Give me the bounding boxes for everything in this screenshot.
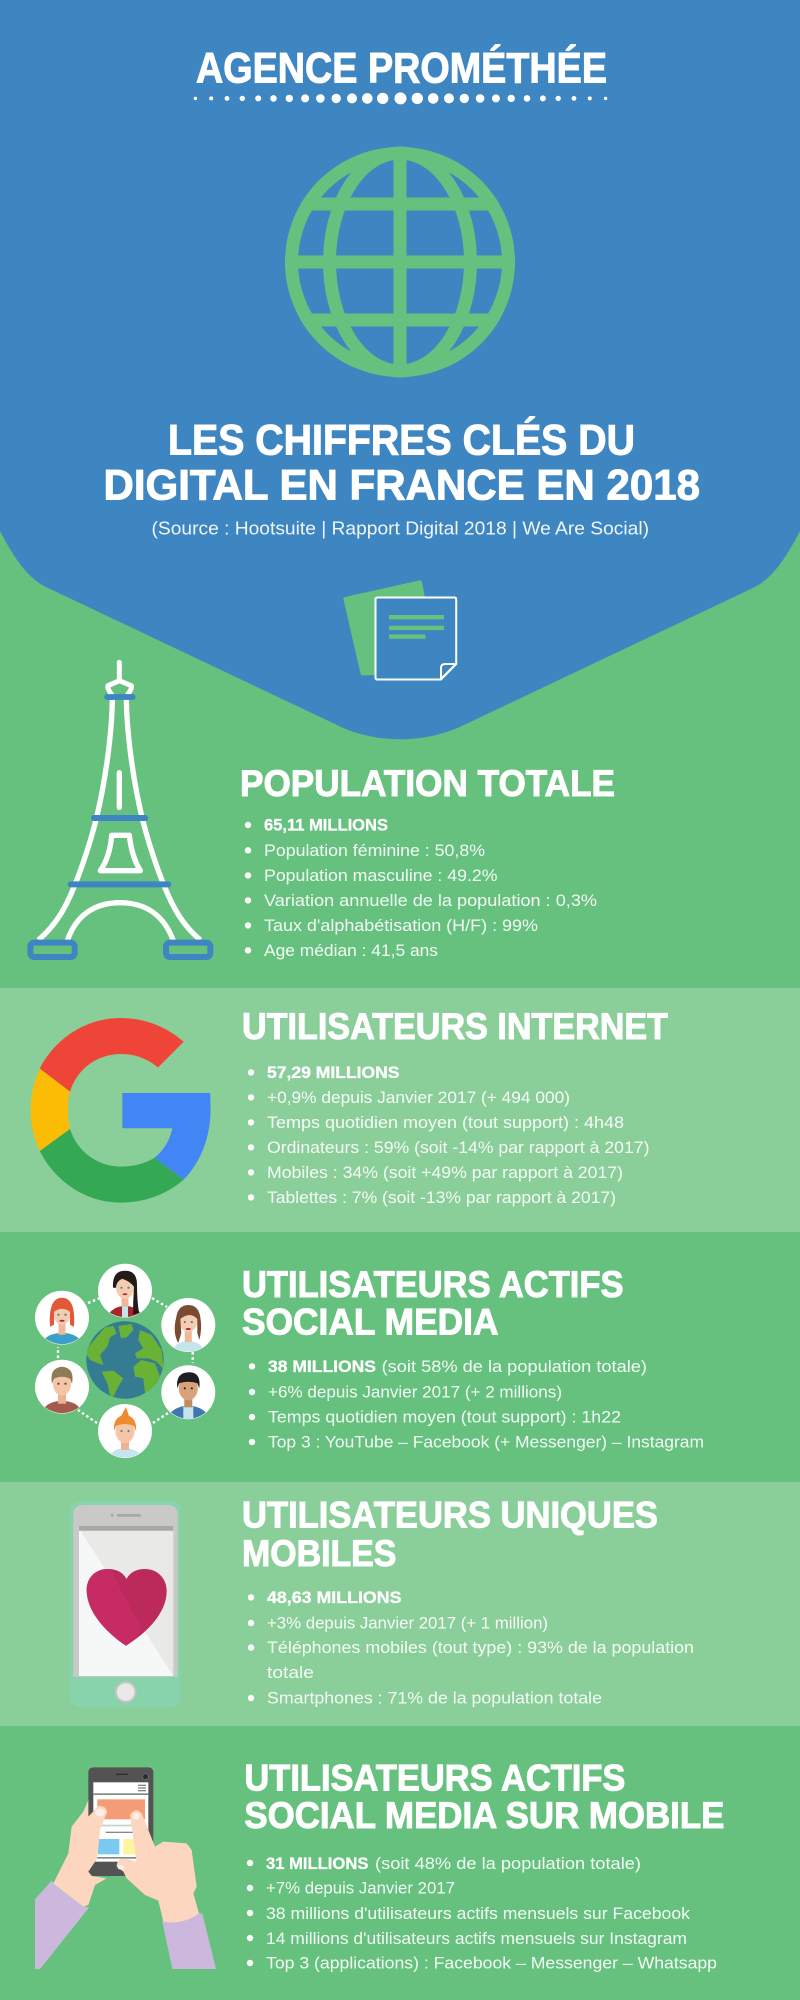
icon: note sheets: [343, 580, 456, 680]
heading: utilisateurs actifs social media: SOCIAL MEDIA: [242, 1301, 498, 1342]
list: internet figures: 57,29 MILLIONS: [267, 1063, 400, 1082]
list: social mobile figures: (soit 48% de la population totale): [375, 1854, 641, 1873]
main heading: DIGITAL EN FRANCE EN 2018: [104, 461, 700, 509]
list: social media figures: 38 MILLIONS: [268, 1357, 376, 1376]
list: population figures: Taux d'alphabétisation (H/F) : 99%: [264, 916, 538, 935]
list: population figures: [245, 816, 597, 960]
panel: utilisateurs actifs social media: [35, 1264, 704, 1458]
list: mobile figures: Téléphones mobiles (tout type) : 93% de la population: [267, 1638, 694, 1657]
heading: population totale: POPULATION TOTALE: [240, 763, 615, 804]
heading: utilisateurs uniques mobiles: UTILISATEURS UNIQUES: [242, 1494, 658, 1536]
list: population figures: Population féminine : 50,8%: [264, 841, 485, 860]
list: social mobile figures: 38 millions d'utilisateurs actifs mensuels sur Facebook: [266, 1904, 691, 1923]
heading: social media sur mobile: [244, 1758, 724, 1836]
agency title: AGENCE PROMÉTHÉE: [196, 44, 607, 92]
list: mobile figures: 48,63 MILLIONS: [267, 1588, 402, 1607]
list: social mobile figures: Top 3 (applications) : Facebook – Messenger – Whatsapp: [266, 1954, 717, 1973]
heading: utilisateurs uniques mobiles: MOBILES: [242, 1533, 396, 1574]
avatar: brown-haired woman: [161, 1298, 215, 1352]
icon: hands holding smartphone: [35, 1767, 216, 1969]
list: social mobile figures: [247, 1854, 717, 1973]
list: internet figures: Ordinateurs : 59% (soit -14% par rapport à 2017): [267, 1138, 650, 1157]
main heading: LES CHIFFRES CLÉS DU: [168, 417, 635, 465]
avatar: woman top: [98, 1264, 152, 1318]
list: population figures: 65,11 MILLIONS: [264, 816, 388, 835]
avatar: man with orange hair: [98, 1404, 152, 1458]
list: population figures: Age médian : 41,5 ans: [264, 941, 438, 960]
list: social media figures: [249, 1357, 704, 1451]
source line: (Source : Hootsuite | Rapport Digital 2018 | We Are Social): [152, 519, 649, 539]
list: social mobile figures: 31 MILLIONS: [266, 1854, 368, 1873]
panel: utilisateurs internet: [0, 988, 800, 1232]
header panel: blue shape: [0, 0, 800, 739]
heading: utilisateurs uniques mobiles: [242, 1494, 658, 1574]
icon: Eiffel tower: [30, 662, 210, 957]
panel: utilisateurs uniques mobiles: [0, 1482, 800, 1726]
panel: utilisateurs actifs social media sur mobile: [35, 1758, 724, 1973]
list: social mobile figures: 14 millions d'utilisateurs actifs mensuels sur Instagram: [266, 1929, 687, 1948]
list: social media figures: +6% depuis Janvier 2017 (+ 2 millions): [268, 1383, 562, 1402]
list: social media figures: (soit 58% de la population totale): [382, 1357, 647, 1376]
dotted divider: [194, 92, 607, 104]
icon: globe: [285, 146, 515, 378]
panel: population totale: [30, 662, 615, 960]
list: social media figures: Temps quotidien moyen (tout support) : 1h22: [268, 1408, 621, 1426]
list: social media figures: Top 3 : YouTube – Facebook (+ Messenger) – Instagram: [268, 1432, 704, 1451]
avatar: dark-haired man: [161, 1365, 215, 1419]
list: mobile figures: +3% depuis Janvier 2017 (+ 1 million): [267, 1614, 548, 1632]
heading: social media sur mobile: SOCIAL MEDIA SUR MOBILE: [244, 1795, 724, 1836]
icon: phone with heart: [70, 1501, 181, 1707]
avatar: red-haired woman: [35, 1291, 89, 1345]
list: internet figures: Temps quotidien moyen (tout support) : 4h48: [267, 1113, 624, 1132]
list: internet figures: +0,9% depuis Janvier 2017 (+ 494 000): [267, 1088, 570, 1107]
list: social mobile figures: +7% depuis Janvier 2017: [266, 1879, 455, 1898]
list: internet figures: [248, 1063, 650, 1207]
avatar: man bottom left: [35, 1360, 89, 1414]
list: internet figures: Mobiles : 34% (soit +49% par rapport à 2017): [267, 1163, 623, 1182]
list: internet figures: Tablettes : 7% (soit -13% par rapport à 2017): [267, 1188, 616, 1207]
heading: utilisateurs internet: UTILISATEURS INTERNET: [242, 1006, 668, 1047]
list: mobile figures: totale: [267, 1663, 314, 1682]
main heading: [104, 417, 700, 509]
heading: social media sur mobile: UTILISATEURS ACTIFS: [244, 1758, 625, 1799]
list: mobile figures: [248, 1588, 694, 1708]
heading: utilisateurs actifs social media: UTILISATEURS ACTIFS: [242, 1264, 624, 1305]
heading: utilisateurs actifs social media: [242, 1264, 624, 1342]
list: population figures: Variation annuelle de la population : 0,3%: [264, 891, 597, 910]
icon: Google G: [31, 1018, 210, 1203]
list: population figures: Population masculine : 49.2%: [264, 866, 498, 885]
icon: people around the globe: [35, 1264, 215, 1458]
list: mobile figures: Smartphones : 71% de la population totale: [267, 1689, 602, 1708]
